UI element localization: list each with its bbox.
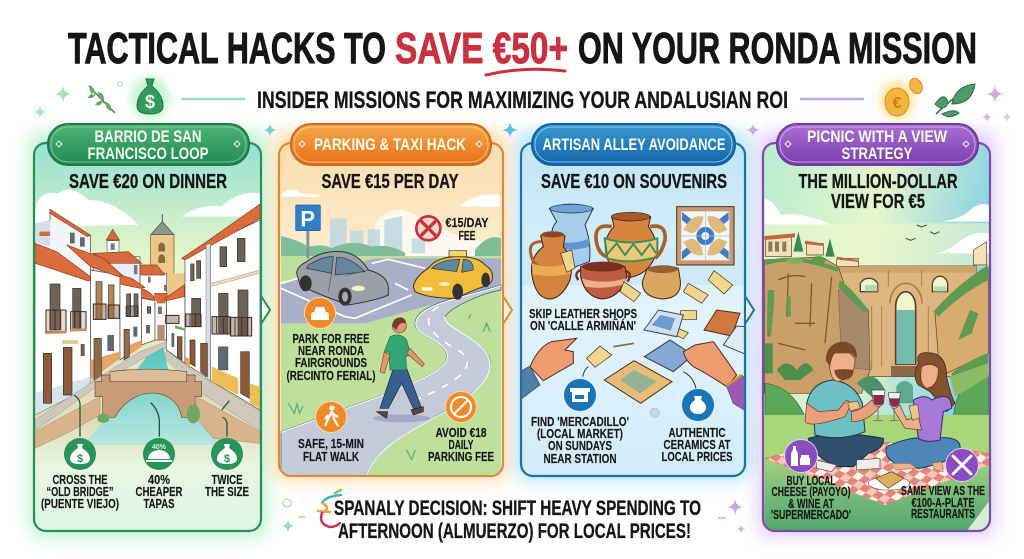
- subtitle: INSIDER MISSIONS FOR MAXIMIZING YOUR ANDALUSIAN ROI: [257, 87, 788, 114]
- closing tip text: [334, 497, 701, 543]
- label: safe walk: SAFE, 15-MIN: [298, 437, 364, 451]
- label: authentic ceramics: [662, 426, 732, 464]
- left cliff: [764, 257, 870, 393]
- icon: money bag badge: [64, 438, 96, 470]
- small tiles: [644, 310, 683, 337]
- bridge: [838, 266, 977, 377]
- heading pill: [777, 124, 978, 165]
- label: buy local cheese: & WINE AT: [788, 497, 834, 511]
- label: find mercadillo: [531, 415, 629, 466]
- label: buy local cheese: BUY LOCAL: [786, 474, 836, 488]
- heading pill: [48, 124, 249, 165]
- label: cheaper tapas: [136, 473, 182, 511]
- heading pill: [532, 124, 735, 165]
- right cliff: [935, 270, 988, 373]
- tile frame: [677, 207, 734, 265]
- label: buy local cheese: 'SUPERMERCADO': [771, 508, 851, 522]
- label: cross the old bridge: (PUENTE VIEJO): [41, 497, 119, 511]
- label: safe walk: FLAT WALK: [303, 450, 359, 464]
- label: safe walk: [298, 437, 364, 464]
- label: find mercadillo: (LOCAL MARKET): [537, 427, 623, 441]
- icon: coin and leaves: €: [893, 95, 902, 112]
- panel: Artisan Alley Avoidance: [520, 124, 754, 476]
- blue vase: [549, 204, 593, 270]
- label: fee: €15/DAY: [446, 216, 489, 230]
- savings headline: [798, 171, 958, 213]
- connector arrow: [503, 296, 512, 324]
- label: buy local cheese: [771, 474, 851, 522]
- price tags: [620, 282, 641, 302]
- savings headline: VIEW FOR €5: [831, 191, 925, 213]
- decorative bottom sparkles: [280, 498, 746, 534]
- heading pill: [291, 124, 491, 165]
- label: skip leather shops: SKIP LEATHER SHOPS: [529, 307, 637, 321]
- label: park for free: PARK FOR FREE: [292, 332, 370, 346]
- icon: money bag badge: $: [224, 453, 230, 465]
- heading pill: FRANCISCO LOOP: [88, 144, 208, 163]
- large pot: [605, 213, 656, 277]
- label: twice the size: THE SIZE: [205, 485, 249, 499]
- small pot: [642, 266, 680, 299]
- heading pill: PICNIC WITH A VIEW: [807, 127, 948, 146]
- label: park for free: [286, 332, 376, 383]
- title: TACTICAL HACKS TO: [68, 24, 386, 73]
- icon: cloche badge: [143, 438, 175, 470]
- hands: [530, 338, 577, 381]
- savings headline: THE MILLION-DOLLAR: [798, 171, 958, 193]
- panel: Barrio de San Francisco Loop: [34, 124, 270, 531]
- label: park for free: NEAR RONDA: [298, 344, 364, 358]
- heading pill: ARTISAN ALLEY AVOIDANCE: [542, 135, 726, 154]
- label: authentic ceramics: LOCAL PRICES: [662, 450, 732, 464]
- label: twice the size: TWICE: [212, 473, 242, 487]
- icon: wine and cheese badge: [784, 440, 818, 472]
- woman: [886, 438, 960, 468]
- terracotta jug: [531, 232, 571, 299]
- icon: colorful swirl logo: [318, 490, 341, 527]
- label: cheaper tapas: CHEAPER: [136, 485, 182, 499]
- icon: market badge: [564, 379, 596, 411]
- savings headline: SAVE €15 PER DAY: [322, 171, 459, 193]
- savings headline: SAVE €20 ON DINNER: [69, 171, 227, 193]
- savings headline: SAVE €10 ON SOUVENIRS: [541, 171, 727, 193]
- illustration: parking lot, taxi and walking road: [281, 190, 502, 489]
- title: SAVE €50+: [395, 24, 568, 73]
- label: avoid fee: DAILY: [448, 438, 474, 452]
- illustration: Puente Nuevo and picnic couple: [764, 198, 991, 533]
- meadow: [764, 415, 991, 468]
- closing tip text: AFTERNOON (ALMUERZO) FOR LOCAL PRICES!: [338, 520, 691, 543]
- label: cross the old bridge: “OLD BRIDGE”: [46, 485, 114, 499]
- illustration: ceramics, tiles and hands: [520, 204, 747, 417]
- label: park for free: FAIRGROUNDS: [295, 356, 367, 370]
- label: fee: [446, 216, 489, 243]
- label: cross the old bridge: [41, 473, 119, 511]
- label: avoid fee: PARKING FEE: [428, 450, 494, 464]
- icon: walker badge: [316, 402, 346, 432]
- icon: jug badge: [682, 389, 714, 421]
- icon: money bag badge: [211, 438, 243, 470]
- label: find mercadillo: FIND 'MERCADILLO': [531, 415, 629, 429]
- illustration: white village street and old bridge: [35, 190, 262, 448]
- connector arrow: [261, 296, 270, 324]
- label: authentic ceramics: CERAMICS AT: [664, 438, 731, 452]
- card glows: [28, 130, 997, 538]
- label: buy local cheese: CHEESE (PAYOYO): [772, 485, 850, 499]
- icon: no euro badge: [446, 392, 476, 422]
- decorative sparkles: [32, 84, 1013, 140]
- icon: money bag and olive branch: $: [145, 92, 155, 112]
- label: find mercadillo: ON SUNDAYS: [548, 439, 612, 453]
- label: cheaper tapas: 40%: [148, 473, 170, 487]
- label: same view: [901, 484, 985, 521]
- heading pill: PARKING & TAXI HACK: [314, 135, 467, 154]
- label: avoid fee: AVOID €18: [436, 426, 487, 440]
- label: cross the old bridge: CROSS THE: [52, 473, 108, 487]
- illustration: parking lot, taxi and walking road: P: [300, 207, 315, 232]
- bowl: [581, 262, 627, 299]
- heading pill: BARRIO DE SAN: [94, 127, 202, 146]
- label: fee: FEE: [458, 229, 476, 243]
- icon: fork and knife badge: [946, 448, 978, 482]
- left town: [766, 236, 792, 257]
- heading pill: STRATEGY: [842, 144, 913, 163]
- icon: money bag badge: $: [77, 453, 83, 465]
- man: [808, 434, 883, 467]
- label: twice the size: [205, 473, 249, 499]
- icon: car badge: [304, 298, 336, 328]
- label: skip leather shops: ON 'CALLE ARMIÑÁN': [530, 318, 636, 333]
- wine glasses: [872, 390, 900, 408]
- label: find mercadillo: NEAR STATION: [544, 452, 616, 466]
- label: avoid fee: [428, 426, 494, 464]
- label: same view: RESTAURANTS: [911, 507, 975, 521]
- label: cheaper tapas: TAPAS: [144, 497, 174, 511]
- label: same view: SAME VIEW AS THE: [901, 484, 985, 498]
- closing tip text: SPANALY DECISION: SHIFT HEAVY SPENDING TO: [334, 497, 701, 520]
- icon: money bag and olive branch: [88, 76, 170, 120]
- label: skip leather shops: [529, 307, 637, 333]
- label: same view: €100-A-PLATE: [912, 496, 974, 510]
- title: [68, 24, 977, 75]
- blanket: [765, 440, 990, 505]
- panel: Parking and Taxi Hack: [279, 124, 512, 489]
- connector arrow: [745, 296, 754, 324]
- label: park for free: (RECINTO FERIAL): [286, 369, 376, 383]
- panel: Picnic with a View Strategy: [763, 124, 991, 533]
- food plate: [868, 477, 910, 490]
- label: authentic ceramics: AUTHENTIC: [668, 426, 726, 440]
- icon: coin and leaves: [879, 76, 975, 120]
- icon: cloche badge: 40%: [152, 444, 167, 451]
